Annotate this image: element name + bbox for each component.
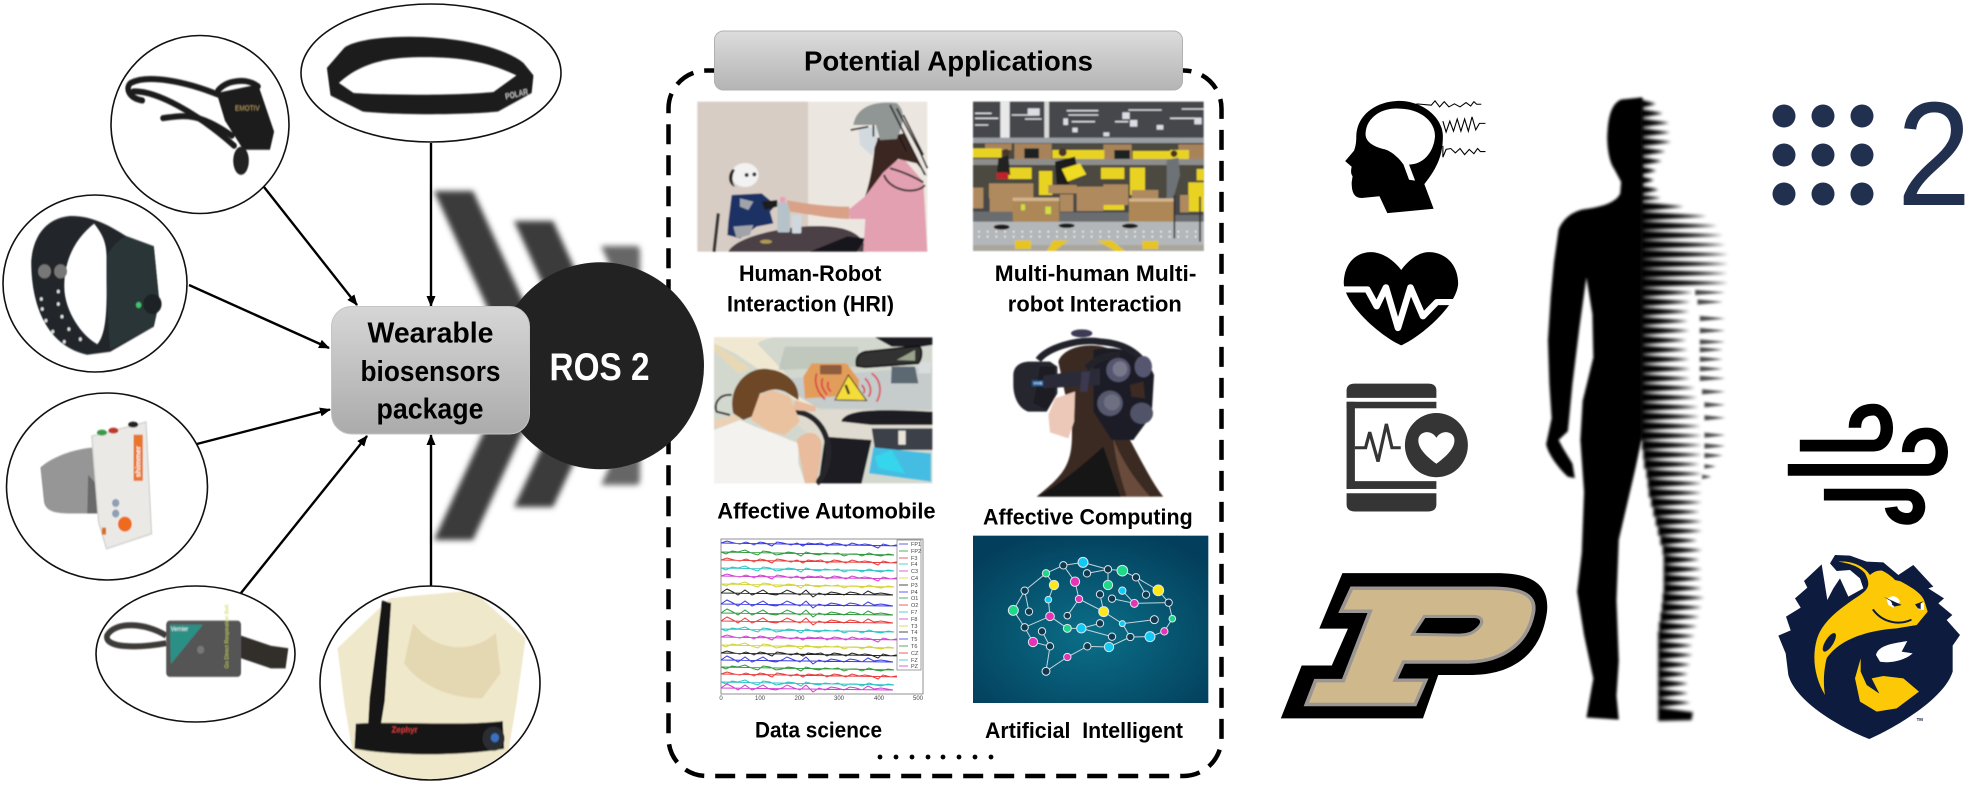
arrow: top headband <box>430 143 432 306</box>
sensor: polar heart band <box>301 4 561 142</box>
heading: potential applications <box>714 31 1182 90</box>
chevrons: ROS logo background <box>434 191 656 540</box>
network nodes <box>1008 557 1176 675</box>
legend: EEG channels: FP1 <box>911 542 921 548</box>
sensor: chest strap <box>320 586 540 784</box>
legend: EEG channels: P3 <box>911 583 918 589</box>
sensor: respiration belt: Go Direct Respiration Belt <box>225 604 231 668</box>
photo: VR headset with EEG: VIVE <box>1033 381 1043 386</box>
logo: ROS 2 dots and numeral: 2 <box>1897 72 1971 237</box>
ellipsis dots <box>878 755 993 759</box>
label: affective automobile: Affective Automobile <box>717 499 936 524</box>
axis tick labels <box>719 696 924 702</box>
legend: EEG channels: O2 <box>911 603 918 609</box>
axis tick labels: 400 <box>874 696 885 702</box>
ROS 2 circle <box>497 262 704 469</box>
legend: EEG channels: FP2 <box>911 549 921 555</box>
box: wearable biosensors package: package <box>376 394 484 426</box>
arrow: chest strap <box>430 435 432 586</box>
legend: EEG channels: T5 <box>911 637 917 643</box>
legend: EEG channels: F8 <box>911 617 917 623</box>
panel: potential applications dashed border <box>668 70 1222 776</box>
figure: dissolving human silhouette <box>1546 97 1729 721</box>
sensor: EEG headset <box>111 36 289 214</box>
legend: EEG channels: O1 <box>911 596 918 602</box>
logo: Purdue P <box>1281 573 1547 718</box>
axis tick labels: 0 <box>719 696 723 702</box>
photo: VR headset with EEG <box>1013 329 1163 497</box>
label: multi-human multi-robot interaction: Multi-human Multi- <box>995 261 1196 286</box>
sensor: respiration belt <box>96 586 295 722</box>
logo: ROS 2 dots and numeral <box>1772 72 1971 237</box>
legend: EEG channels <box>897 540 921 670</box>
photo: human-robot interaction <box>697 102 927 252</box>
sensor: shimmer: shimmer <box>134 446 142 477</box>
label: multi-human multi-robot interaction: robot Interaction <box>1008 292 1182 317</box>
legend: EEG channels: F7 <box>911 610 917 616</box>
legend: EEG channels: C4 <box>911 576 918 582</box>
legend: EEG channels: PZ <box>911 664 919 670</box>
axis tick labels: 500 <box>913 696 924 702</box>
legend: EEG channels: F3 <box>911 556 917 562</box>
box: wearable biosensors package <box>332 306 530 434</box>
arrow: wristband <box>189 285 329 348</box>
axis tick labels: 300 <box>834 696 845 702</box>
chart: EEG traces <box>719 539 924 702</box>
heading: potential applications: Potential Applications <box>804 46 1093 76</box>
sensor: wristband <box>3 195 187 372</box>
box: wearable biosensors package: biosensors <box>360 356 500 388</box>
icon: wind <box>1788 410 1942 519</box>
sensor: chest strap: Zephyr <box>392 725 418 735</box>
icon: head with brain waves <box>1345 101 1485 213</box>
label: data science: Data science <box>755 718 882 742</box>
arrow: respiration belt <box>241 436 367 593</box>
logo: banana slug shield <box>1778 555 1960 739</box>
legend: EEG channels: FZ <box>911 658 918 664</box>
axis tick labels: 200 <box>794 696 805 702</box>
photo: warehouse multi-human multi-robot <box>973 102 1204 251</box>
arrows: sensors to package <box>189 143 431 593</box>
sensor: respiration belt: Vernier <box>171 627 188 633</box>
sensor: polar heart band: POLAR <box>505 87 529 102</box>
axis tick labels: 100 <box>755 696 766 702</box>
legend: EEG channels: T3 <box>911 624 917 630</box>
arrow: shimmer <box>193 410 330 445</box>
legend: EEG channels: F4 <box>911 562 917 568</box>
legend: EEG channels: C3 <box>911 569 918 575</box>
arrow: EEG headset <box>264 187 357 305</box>
network edges <box>1013 562 1172 671</box>
box: wearable biosensors package: Wearable <box>368 318 494 350</box>
sensor: EEG headset: EMOTIV <box>235 105 260 113</box>
right column: icons and figure <box>1281 97 1942 721</box>
legend: EEG channels: CZ <box>911 651 919 657</box>
label: human-robot interaction: Interaction (HRI) <box>727 292 894 317</box>
icon: phone with heart monitor <box>1347 384 1468 512</box>
label: affective computing: Affective Computing <box>983 504 1193 530</box>
image: AI brain network <box>973 536 1208 703</box>
icon: heart with pulse <box>1341 252 1458 345</box>
legend: EEG channels: P4 <box>911 590 918 596</box>
legend: EEG channels: T6 <box>911 644 917 650</box>
label: artificial intelligent: Artificial Intelligent <box>985 718 1184 743</box>
photo: drowsy driver in car <box>714 337 932 483</box>
label: human-robot interaction: Human-Robot <box>739 261 882 286</box>
legend: EEG channels: T4 <box>911 630 917 636</box>
logo: banana slug shield: TM <box>1917 717 1923 722</box>
ROS 2 circle: ROS 2 <box>550 346 650 389</box>
sensor: shimmer <box>6 393 208 580</box>
